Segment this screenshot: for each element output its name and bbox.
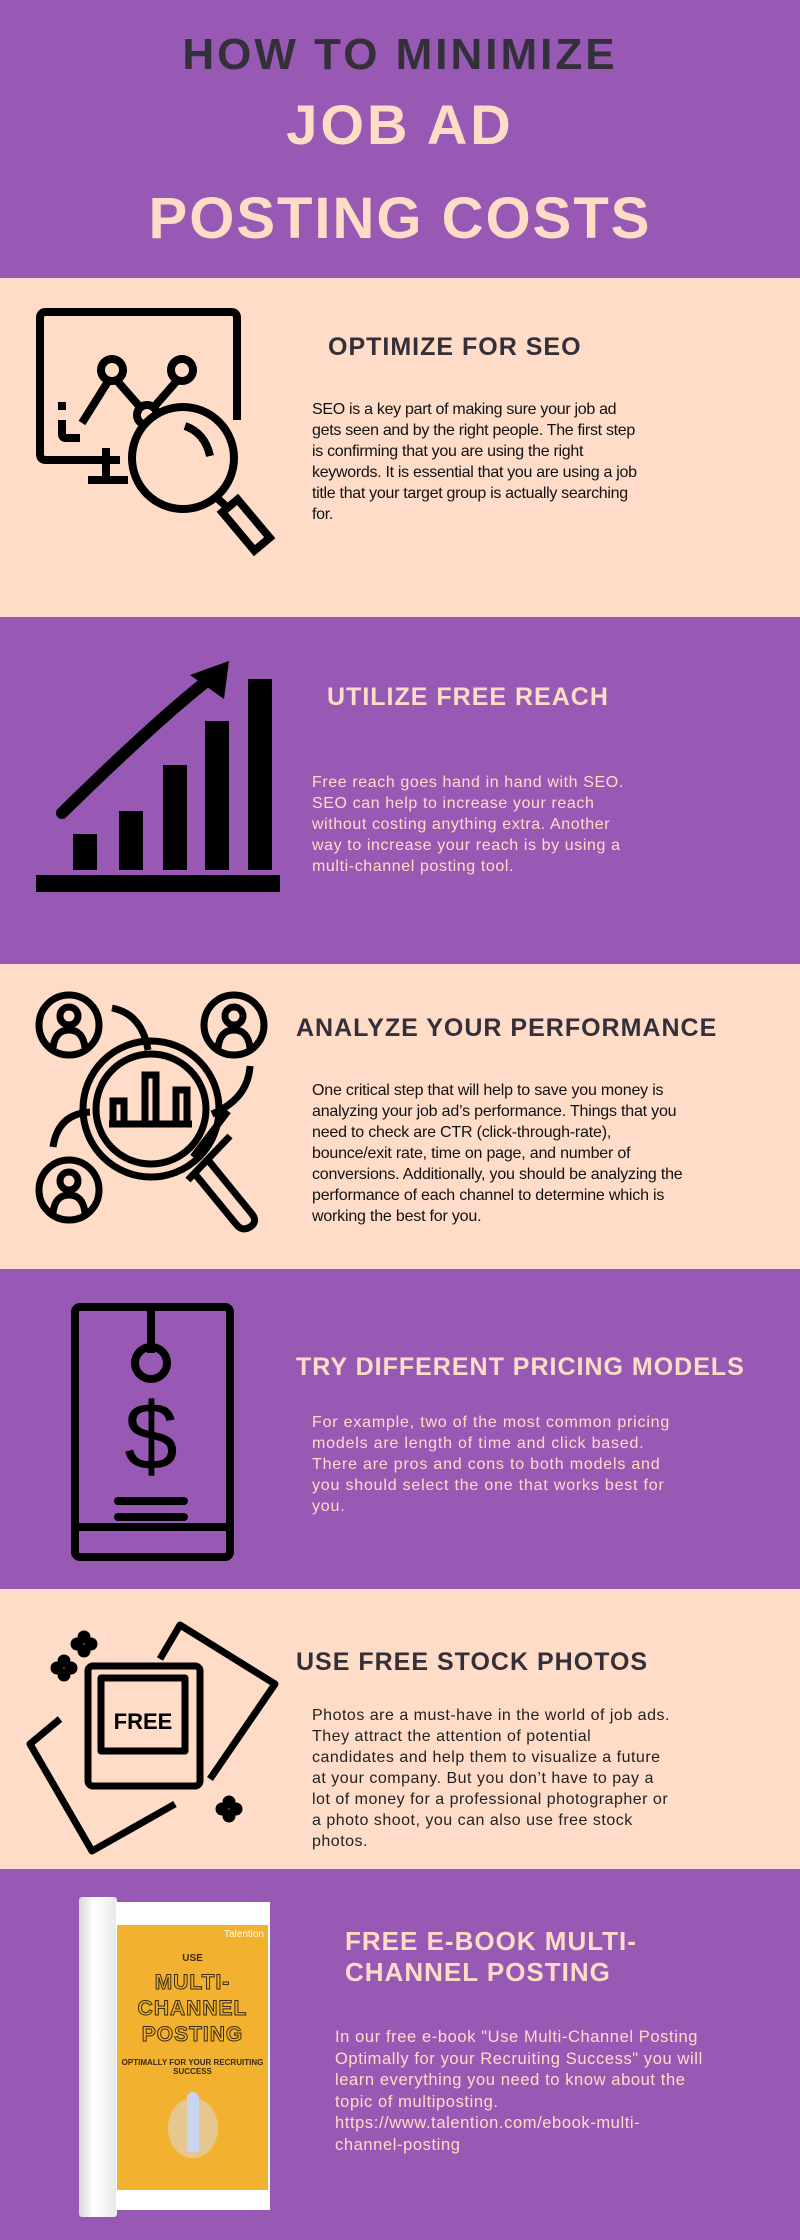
icon: photos: FREE [114,1709,172,1734]
body text [312,1707,670,1850]
body text [335,2028,703,2154]
body text: for. [312,506,333,523]
body text [312,401,637,523]
body text: candidates and help them to visualize a future [312,1749,661,1766]
icon: price tag: $ [124,1383,178,1490]
body text: learn everything you need to know about the [335,2071,686,2089]
body text: way to increase your reach is by using a [312,837,621,854]
body text: gets seen and by the right people. The first step [312,422,635,439]
ebook cover: POSTING [142,2023,243,2046]
ebook cover: CHANNEL [138,1997,247,2020]
body text: lot of money for a professional photographer or [312,1791,668,1808]
ebook cover: SUCCESS [173,2067,212,2076]
body text: SEO is a key part of making sure your job ad [312,401,616,418]
body text: analyzing your job ad’s performance. Things that you [312,1103,676,1120]
icon: analytics magnifier with people [36,992,268,1232]
body text [312,1414,670,1515]
icon: price tag [71,1303,234,1561]
ebook cover: MULTI- [155,1971,230,1994]
ebook cover [79,1897,270,2217]
body text: SEO can help to increase your reach [312,795,594,812]
body text: conversions. Additionally, you should be analyzing the [312,1166,682,1183]
body text: is confirming that you are using the right [312,443,583,460]
body text: bounce/exit rate, time on page, and number of [312,1145,630,1162]
panel: utilize free reach [0,617,800,964]
ebook cover: Talention [224,1929,264,1940]
heading: UTILIZE FREE REACH [327,683,609,711]
body text: topic of multiposting. [335,2092,499,2110]
header panel [0,0,800,278]
heading: ANALYZE YOUR PERFORMANCE [296,1014,717,1042]
body text: need to check are CTR (click-through-rate), [312,1124,611,1141]
title line 1: HOW TO MINIMIZE [182,30,618,79]
panel: optimize for SEO [0,278,800,617]
body text: at your company. But you don’t have to pay a [312,1770,654,1787]
panel: pricing models [0,1269,800,1589]
body text [312,774,624,875]
body text: One critical step that will help to save you money is [312,1082,663,1099]
body text: Photos are a must-have in the world of job ads. [312,1707,670,1724]
body text: you should select the one that works best for [312,1477,665,1494]
body text: performance of each channel to determine which is [312,1187,664,1204]
ebook cover: USE [182,1953,203,1964]
icon: growth chart [36,661,280,892]
heading [345,1926,637,1987]
panel: free stock photos [0,1589,800,1869]
body text: Free reach goes hand in hand with SEO. [312,774,624,791]
body text: a photo shoot, you can also use free stock [312,1812,633,1829]
heading: TRY DIFFERENT PRICING MODELS [296,1353,745,1381]
title line 3: POSTING COSTS [149,186,651,251]
heading: USE FREE STOCK PHOTOS [296,1648,648,1676]
body text: https://www.talention.com/ebook-multi- [335,2114,640,2132]
body text: In our free e-book "Use Multi-Channel Posting [335,2028,698,2046]
body text: title that your target group is actually searching [312,485,628,502]
body text: without costing anything extra. Another [312,816,610,833]
title line 2: JOB AD [286,93,514,156]
panel: analyze performance [0,964,800,1269]
body text: They attract the attention of potential [312,1728,591,1745]
body text: Optimally for your Recruiting Success" you will [335,2050,703,2068]
body text: For example, two of the most common pricing [312,1414,670,1431]
body text: multi-channel posting tool. [312,858,514,875]
body text: working the best for you. [312,1208,481,1225]
panel: free e-book [0,1869,800,2240]
ebook cover: OPTIMALLY FOR YOUR RECRUITING [122,2058,263,2067]
body text: photos. [312,1833,368,1850]
heading: OPTIMIZE FOR SEO [328,333,582,361]
heading: FREE E-BOOK MULTI- [345,1926,637,1956]
body text: you. [312,1498,345,1515]
icon: monitor with magnifier [36,308,276,556]
body text [312,1082,682,1225]
body text: There are pros and cons to both models and [312,1456,660,1473]
icon: photos [26,1622,278,1854]
body text: models are length of time and click based. [312,1435,644,1452]
body text: channel-posting [335,2136,460,2154]
body text: keywords. It is essential that you are using a job [312,464,637,481]
heading: CHANNEL POSTING [345,1957,611,1987]
